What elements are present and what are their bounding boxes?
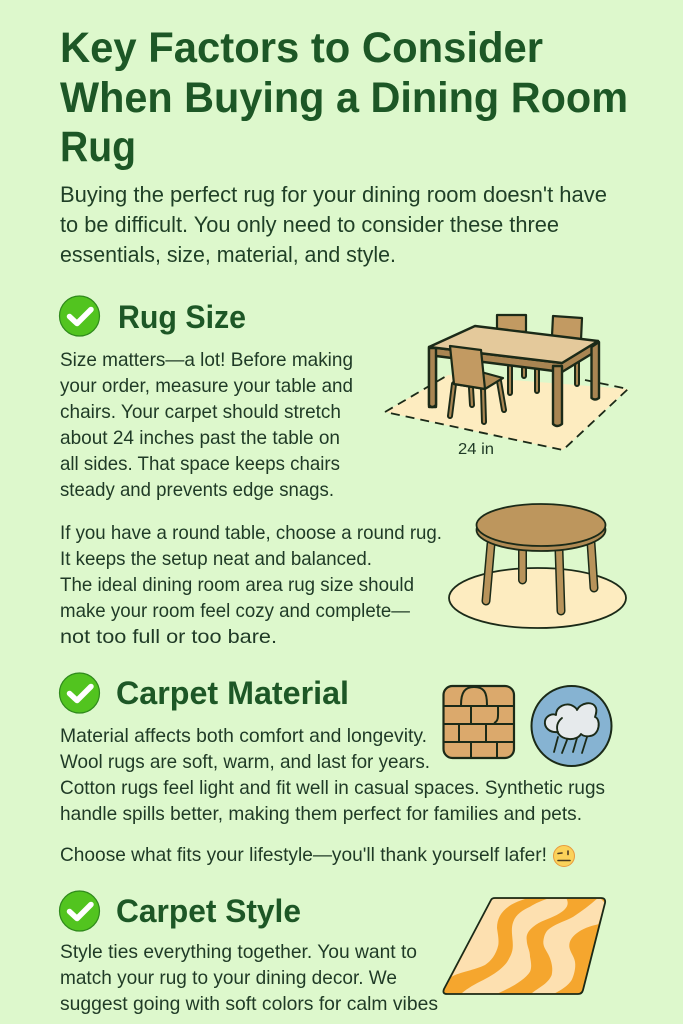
text: material paragraph: handle spills better, making them perfect for families and pets.	[60, 803, 582, 825]
text: material paragraph: Cotton rugs feel light and fit well in casual spaces. Synthetic rugs	[60, 777, 605, 799]
text: style paragraph: Style ties everything together. You want to	[60, 941, 417, 963]
back chairs	[497, 315, 582, 393]
text: lifestyle line: Choose what fits your lifestyle—you'll thank yourself lafer!	[60, 844, 547, 866]
text: material paragraph: Wool rugs are soft, warm, and last for years.	[60, 751, 430, 773]
illustration: rectangular table on rug	[385, 315, 628, 458]
intro text: essentials, size, material, and style.	[60, 242, 396, 267]
table legs and apron	[429, 341, 599, 426]
text: round table paragraph: not too full or too bare.	[60, 626, 277, 648]
text: style paragraph: match your rug to your dining decor. We	[60, 967, 397, 989]
heading: carpet style: Carpet Style	[116, 893, 301, 929]
icon: check mark rug size	[60, 296, 100, 336]
icon: check mark carpet style	[60, 891, 100, 931]
text: rug size paragraph: steady and prevents edge snags.	[60, 479, 334, 501]
heading: rug size: Rug Size	[118, 299, 246, 335]
front chair	[450, 346, 504, 422]
round table top	[476, 504, 606, 551]
text: rug size paragraph: your order, measure your table and	[60, 375, 353, 397]
text: material paragraph	[60, 725, 605, 825]
text: style paragraph: suggest going with soft colors for calm vibes	[60, 993, 438, 1015]
text: style paragraph	[60, 941, 438, 1015]
icon: brick swatch	[444, 686, 514, 758]
round rug	[449, 568, 626, 628]
text: rug size paragraph	[60, 349, 353, 501]
table legs	[486, 543, 594, 611]
intro text: Buying the perfect rug for your dining room doesn't have	[60, 182, 607, 207]
text: round table paragraph: It keeps the setup neat and balanced.	[60, 548, 372, 570]
title: Key Factors to Consider	[60, 24, 543, 72]
text: rug size paragraph: chairs. Your carpet should stretch	[60, 401, 341, 423]
text: round table paragraph	[60, 522, 442, 648]
text: rug size paragraph: about 24 inches past the table on	[60, 427, 340, 449]
heading: carpet material: Carpet Material	[116, 675, 349, 711]
icon: cloud in blue circle	[532, 686, 612, 766]
table top	[429, 326, 598, 363]
intro text: to be difficult. You only need to consider these three	[60, 212, 559, 237]
title: When Buying a Dining Room	[60, 74, 628, 122]
text: rug size paragraph: all sides. That space keeps chairs	[60, 453, 340, 475]
title: Rug	[60, 123, 136, 171]
text: material paragraph: Material affects both comfort and longevity.	[60, 725, 427, 747]
text: rug size paragraph: Size matters—a lot! Before making	[60, 349, 353, 371]
label: 24 in: 24 in	[458, 441, 494, 458]
icon: neutral face emoji	[554, 846, 574, 866]
title	[60, 24, 628, 171]
intro text	[60, 182, 607, 267]
text: round table paragraph: The ideal dining room area rug size should	[60, 574, 414, 596]
text: round table paragraph: make your room feel cozy and complete—	[60, 600, 410, 622]
illustration: wavy patterned rug	[443, 898, 605, 994]
text: round table paragraph: If you have a round table, choose a round rug.	[60, 522, 442, 544]
rug with dashed border	[385, 375, 628, 450]
illustration: round table on round rug	[449, 504, 626, 628]
icon: check mark carpet material	[60, 673, 100, 713]
